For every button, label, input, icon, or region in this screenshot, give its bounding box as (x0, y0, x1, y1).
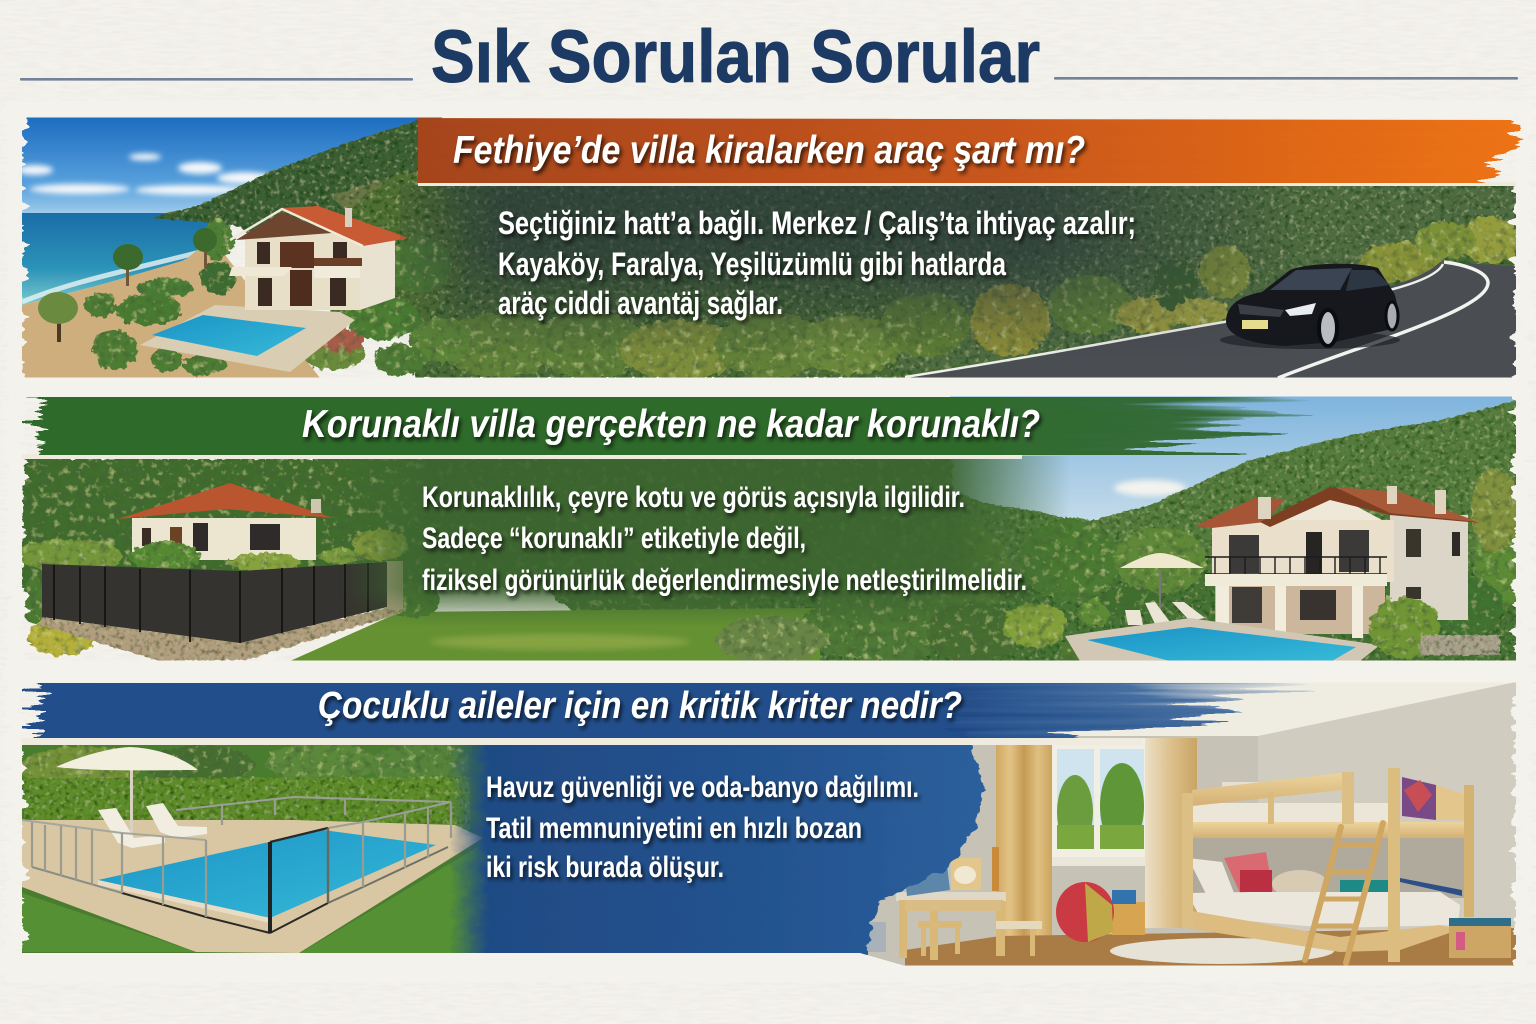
title: Sık Sorulan Sorular (431, 15, 1040, 98)
question banner: green (40, 397, 1290, 455)
question banner: blue: Çocuklu aileler için en kritik kriter nedir? (318, 685, 962, 727)
photo: fence, garden, hills and villa (18, 396, 1526, 664)
rear wheel (1386, 302, 1398, 330)
answer text: Seçtiğiniz hatt’a bağlı. Merkez / Çalış’ta ihtiyaç azalır; (498, 205, 1136, 241)
mid forest (550, 468, 1526, 625)
storage chest (1449, 918, 1511, 958)
upper glazing (1229, 535, 1259, 573)
bunk bed (1182, 768, 1474, 963)
grass lower left (22, 893, 196, 952)
parasol (1120, 553, 1204, 612)
balcony slab (1205, 574, 1387, 586)
road centre line (1278, 262, 1488, 378)
toy ball and box (1056, 882, 1145, 942)
torn paper edge (14, 109, 1524, 386)
parasol (56, 747, 198, 837)
mountain (150, 120, 418, 233)
answer text (486, 771, 919, 884)
guard rail (1192, 773, 1342, 806)
road (905, 262, 1516, 378)
curtain left (996, 742, 1052, 938)
question banner: orange (400, 118, 1512, 183)
number plate (1242, 320, 1268, 329)
question banner: green: Korunaklı villa gerçekten ne kadar korunaklı? (302, 403, 1040, 446)
window (1050, 738, 1148, 866)
panel: families with children question (0, 670, 1524, 974)
lower pillows (1188, 858, 1234, 898)
surf line (22, 252, 200, 302)
paper strip under banner (418, 182, 1516, 186)
columns (1216, 586, 1229, 638)
ceiling (1040, 682, 1516, 736)
answer text: Havuz güvenliği ve oda-banyo dağılımı. (486, 771, 919, 804)
upper front wall (1212, 520, 1394, 582)
waste bin (854, 922, 886, 952)
photo: coast, villa, forest and road (17, 117, 1520, 380)
car shadow (1220, 331, 1400, 349)
title right rule (1054, 77, 1518, 80)
roof (282, 206, 409, 246)
chimney (311, 499, 321, 513)
lower storey door (290, 270, 312, 306)
pool deck (1065, 618, 1380, 661)
mountain terraces (330, 170, 418, 211)
shrubs (715, 577, 1503, 664)
answer text: Tatil memnuniyetini en hızlı bozan (486, 812, 862, 845)
tiled roof (118, 483, 333, 519)
grille (1238, 304, 1284, 317)
blue wash behind answer (450, 730, 985, 970)
headlight (1285, 303, 1316, 316)
title left rule (20, 78, 413, 81)
lower frame (1186, 910, 1458, 952)
sky (22, 117, 442, 217)
desk (896, 892, 1006, 960)
side wall (360, 238, 395, 310)
awning (229, 267, 292, 276)
ladder (1305, 823, 1383, 963)
car body (1226, 264, 1398, 346)
floor (905, 928, 1516, 966)
terrace (140, 305, 355, 372)
roof main (1260, 487, 1480, 527)
sky (950, 396, 1520, 566)
shore tree (38, 292, 78, 342)
left trees backdrop (22, 458, 952, 588)
pool (1087, 627, 1356, 661)
room wall left (840, 735, 1258, 966)
palm tree near house (193, 228, 217, 268)
question banner: blue (40, 683, 1300, 738)
beach (22, 238, 320, 378)
paper strip under banner (22, 454, 1022, 459)
answer text (422, 481, 1027, 597)
gable (236, 212, 332, 240)
clouds (17, 154, 273, 195)
text overlay shading (400, 185, 1300, 375)
answer text: Korunaklılık, çeyre kotu ve görüs açısıyla ilgilidir. (422, 481, 965, 514)
windscreen (1270, 268, 1352, 290)
road edge line (905, 264, 1443, 377)
pillow upper (1222, 782, 1258, 798)
answer text: aräç ciddi avantäj sağlar. (498, 285, 783, 321)
small villa (118, 483, 333, 560)
upper bed frame (1182, 822, 1464, 838)
walls (132, 518, 316, 560)
rug (1110, 938, 1334, 964)
poster and head rail (1402, 777, 1436, 820)
car (1220, 264, 1400, 349)
balcony railing (1205, 557, 1387, 574)
side wall (1390, 515, 1468, 620)
pool rim (98, 880, 270, 923)
roof edge (230, 209, 363, 246)
lower bushes (84, 216, 1520, 380)
stone wall (40, 604, 402, 661)
trees (20, 742, 470, 790)
loungers (98, 803, 207, 848)
balcony (314, 258, 362, 266)
lower valley base (700, 570, 1520, 662)
answer text (498, 205, 1136, 321)
hedge (24, 777, 470, 850)
roof left (1195, 498, 1285, 528)
toys on desk (903, 847, 999, 896)
sea (22, 213, 240, 305)
answer text: iki risk burada ölüşur. (486, 851, 724, 884)
pool scene: background (22, 745, 502, 953)
forest backdrop (415, 183, 1520, 378)
curtain right (1145, 738, 1197, 928)
bed posts (1182, 793, 1193, 928)
side windows (1346, 270, 1390, 291)
upper storey windows (257, 242, 270, 264)
answer text: Kayaköy, Faralya, Yeşilüzümlü gibi hatlarda (498, 246, 1006, 282)
torn paper edge (14, 388, 1524, 669)
lower mattress (1187, 892, 1460, 928)
paper below pool scene (0, 953, 905, 974)
chimneys (1258, 497, 1271, 519)
dark fence (42, 562, 387, 643)
paper strip under banner (22, 738, 1142, 745)
garden shrub and stone wall (1369, 598, 1500, 658)
chimney (345, 208, 352, 227)
lower storey (1215, 586, 1385, 634)
cloud (1114, 480, 1186, 496)
windows (142, 528, 151, 546)
pool safety fence (22, 797, 451, 933)
front wheel (1319, 310, 1337, 346)
large villa (1195, 486, 1480, 638)
torn paper edge (14, 674, 1524, 974)
pool (152, 315, 306, 356)
sun loungers (1125, 602, 1205, 625)
upper mattress (1190, 803, 1390, 825)
gable (1276, 492, 1382, 520)
pool water (98, 830, 436, 918)
question banner: orange: Fethiye’de villa kiralarken araç şart mı? (453, 129, 1085, 172)
answer text: Sadeçe “korunaklı” etiketiyle değil, (422, 522, 806, 555)
lower bunk shade (1190, 838, 1464, 898)
side windows (1406, 529, 1421, 557)
panel: Fethiye car question (14, 109, 1524, 386)
photo: fenced pool and children's room (20, 670, 1516, 970)
room wall right (1258, 670, 1516, 966)
mountains (950, 400, 1518, 600)
panel: sheltered villa question (14, 388, 1526, 669)
grass lower right (300, 842, 500, 953)
wall post (386, 561, 403, 609)
green text overlay (340, 456, 1070, 626)
deck (22, 820, 483, 953)
answer text: fiziksel görünürlük değerlendirmesiyle netleştirilmelidir. (422, 564, 1027, 597)
villa (229, 206, 409, 310)
palm tree (113, 244, 143, 286)
front wall (245, 233, 360, 310)
hedges at fence (18, 529, 440, 656)
stools (918, 921, 1042, 956)
lawn (290, 608, 820, 661)
